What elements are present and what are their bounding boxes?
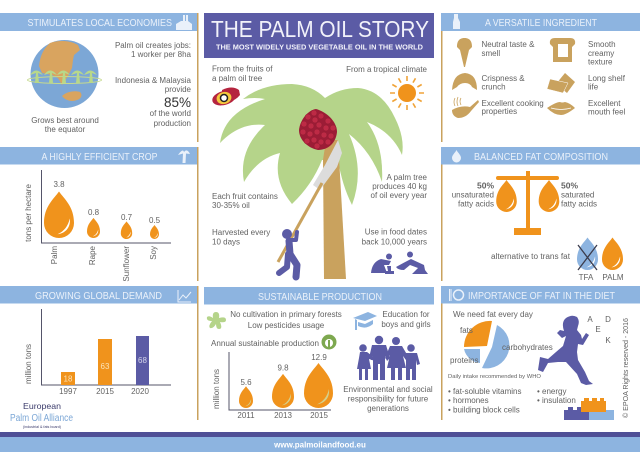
text: creamy texture: texture	[588, 58, 613, 66]
vitamins: E	[595, 325, 601, 334]
text: environmental and social responsibility: generations	[367, 404, 409, 413]
icon: RSPO logo	[322, 334, 336, 350]
list: fat functions left: • fat-soluble vitamins	[448, 387, 522, 396]
chart: tons per hectare: 0.5	[149, 216, 161, 225]
subtitle: THE MOST WIDELY USED VEGETABLE OIL IN THE WORLD	[216, 42, 423, 52]
chart: tons per hectare	[24, 170, 171, 282]
right drop	[539, 180, 559, 212]
chart: tons per hectare: Sunflower	[122, 246, 131, 282]
chart: demand bars: 2015	[96, 387, 114, 396]
text: creamy texture: Smooth	[588, 40, 616, 49]
list: fat functions left: • building block cells	[448, 406, 520, 414]
chart: sustainable production drops: million tons	[212, 369, 221, 409]
rape drop	[87, 218, 100, 238]
heading: stimulates local economies	[0, 13, 197, 31]
text: forests and pesticides: No cultivation in primary forests	[230, 310, 342, 319]
text: from the fruits: a palm oil tree	[212, 74, 263, 83]
icon: frying pan	[452, 97, 479, 118]
chart: demand bars: 18	[64, 374, 73, 384]
heading: growing global demand: GROWING GLOBAL DEMAND	[35, 291, 162, 302]
text: neutral taste: Neutral taste &	[482, 40, 534, 49]
footer url: www.palmoilandfood.eu	[273, 440, 366, 450]
icon: runner	[538, 316, 593, 385]
heading: versatile ingredient: A VERSATILE INGREDIENT	[485, 18, 597, 29]
chart: demand bars: 1997	[59, 387, 77, 396]
text: jobs: Palm oil creates jobs:	[115, 41, 191, 50]
text: harvested: 10 days	[212, 238, 240, 246]
note: who recommendation: Daily intake recommended by WHO	[448, 374, 541, 380]
chart: tons per hectare: 3.8	[53, 180, 65, 189]
chart: sustainable production drops: 2015	[310, 411, 328, 420]
text: indonesia and malaysia 85 percent: of the world	[150, 109, 191, 118]
panel: stimulates local economies	[0, 13, 198, 142]
text: food dates: Use in food dates	[365, 228, 427, 236]
text: unsaturated: 50%	[477, 180, 494, 190]
text: cooking properties: properties	[482, 107, 517, 116]
text: jobs: 1 worker per 8ha	[131, 50, 192, 59]
icon: bread slice	[550, 38, 575, 62]
text: annual sustainable production: Annual sustainable production	[211, 339, 319, 348]
soy drop	[150, 225, 159, 239]
chart: tons per hectare: Rape	[88, 245, 97, 265]
icon: plate	[450, 289, 464, 301]
logo: european palm oil alliance: Palm Oil Alliance	[10, 413, 73, 424]
illustration: palm tree	[220, 84, 403, 279]
palm drop	[44, 192, 74, 238]
icon: family	[357, 336, 420, 380]
text: produces oil: of oil every year	[371, 191, 427, 200]
text: indonesia and malaysia 85 percent: 85%	[164, 95, 191, 110]
chart: sustainable production drops: 2013	[274, 411, 292, 420]
chart: diet pie: fats	[460, 326, 473, 335]
chart: demand bars	[24, 309, 171, 396]
text: indonesia and malaysia 85 percent: Indonesia & Malaysia	[115, 76, 191, 85]
text: we need fat every day: We need fat every day	[453, 310, 533, 319]
vitamins: D	[605, 315, 611, 324]
title: THE PALM OIL STORY	[211, 16, 429, 42]
panel: highly efficient crop	[0, 147, 198, 282]
text: tropical climate: From a tropical climate	[346, 65, 428, 74]
chart: sustainable production drops	[212, 352, 333, 420]
icon: palm drop	[602, 237, 623, 270]
chart: tons per hectare: Soy	[149, 246, 158, 260]
icon: white drop	[452, 150, 461, 162]
heading: balanced fat composition	[441, 147, 640, 164]
list: fat functions left: • hormones	[448, 396, 489, 405]
caption: grows best around the equator: Grows best around	[31, 116, 99, 125]
heading: sustainable production	[204, 287, 434, 304]
list: fat functions right: • insulation	[537, 396, 576, 405]
text: unsaturated: unsaturated	[452, 190, 494, 200]
text: education: boys and girls	[381, 320, 431, 329]
text: indonesia and malaysia 85 percent: provide	[165, 85, 192, 94]
chart: tons per hectare: 0.7	[121, 213, 133, 222]
panel: balanced fat composition	[441, 147, 640, 282]
panel: growing global demand	[0, 286, 198, 429]
text: environmental and social responsibility: Environmental and social	[343, 385, 433, 394]
logo: european palm oil alliance	[10, 401, 73, 429]
harvesting blade	[313, 140, 342, 190]
icon: palm tree	[178, 150, 190, 163]
chart: demand bars: million tons	[24, 344, 33, 384]
text: alternative to trans fat: alternative to trans fat	[491, 252, 571, 261]
chart: demand bars: 63	[101, 362, 110, 371]
list: fat functions right: • energy	[537, 387, 566, 396]
text: environmental and social responsibility: responsibility for future	[348, 394, 429, 404]
text: mouth feel: Excellent	[588, 99, 620, 108]
icon: stacked squares	[547, 73, 575, 93]
icon: sun	[390, 76, 424, 110]
label: PALM: PALM	[602, 273, 624, 282]
text: saturated: fatty acids	[561, 200, 597, 208]
text: saturated: saturated	[561, 190, 594, 200]
heading: sustainable production: SUSTAINABLE PRODUCTION	[258, 292, 382, 303]
icon: factory	[176, 15, 192, 30]
icon: balance scale	[496, 171, 559, 235]
chart: tons per hectare: Palm	[50, 246, 59, 264]
icon: ice cream cone	[457, 38, 472, 67]
panel: importance of fat in the diet	[441, 286, 640, 420]
icon: palm fruit	[211, 88, 240, 108]
heading: versatile ingredient	[441, 13, 640, 31]
icon: crossed TFA drop	[577, 237, 598, 270]
caption: grows best around the equator: the equator	[45, 125, 86, 134]
icon: green flower	[207, 312, 226, 329]
chart: tons per hectare: 0.8	[88, 208, 100, 217]
heading: importance of fat in the diet	[441, 286, 640, 304]
icon: bottle	[453, 14, 460, 29]
text: unsaturated: fatty acids	[458, 200, 494, 208]
icon: line chart	[178, 290, 191, 302]
vitamins	[587, 315, 611, 345]
text: crispness: Crispness &	[482, 74, 525, 83]
logo: european palm oil alliance: European	[23, 401, 61, 411]
heading: balanced fat composition: BALANCED FAT COMPOSITION	[474, 152, 608, 163]
left drop	[496, 180, 517, 212]
heading: stimulates local economies: STIMULATES LOCAL ECONOMIES	[28, 18, 172, 29]
text: each fruit: 30-35% oil	[212, 201, 250, 210]
text: from the fruits: From the fruits of	[212, 64, 272, 74]
icon: building blocks	[564, 398, 614, 420]
chart: tons per hectare: tons per hectare	[24, 184, 33, 242]
chart: sustainable production drops: 9.8	[277, 364, 289, 372]
heading: highly efficient crop	[0, 147, 197, 164]
text: neutral taste: smell	[482, 49, 500, 58]
harvesting pole	[278, 183, 322, 262]
icon: croissant	[452, 73, 477, 90]
text: saturated: 50%	[561, 180, 578, 190]
icon: ancient people	[371, 252, 428, 274]
text: harvested: Harvested every	[212, 228, 270, 237]
icon: lips	[547, 102, 575, 115]
2013 drop	[272, 374, 294, 408]
footer	[0, 432, 640, 452]
heading: growing global demand	[0, 286, 197, 304]
2011 drop	[239, 386, 253, 408]
sunflower drop	[121, 221, 132, 239]
vitamins: K	[605, 336, 611, 345]
chart: demand bars: 68	[138, 356, 147, 365]
2015 drop	[304, 363, 333, 408]
text: food dates: back 10,000 years	[362, 238, 427, 246]
copyright: © EPOA Rights reserved - 2016	[622, 318, 630, 418]
panel: versatile ingredient	[441, 13, 640, 142]
palm fruit bunch	[299, 109, 337, 150]
text: crispness: crunch	[482, 82, 506, 92]
heading: highly efficient crop: A HIGHLY EFFICIENT CROP	[42, 152, 158, 163]
chart: diet pie: carbohydrates	[502, 343, 553, 352]
text: each fruit: Each fruit contains	[212, 192, 278, 201]
icon: graduation cap	[353, 312, 377, 330]
title banner	[204, 13, 434, 58]
text: long shelf life: life	[588, 82, 599, 92]
icon: globe with palm trees	[28, 40, 102, 108]
text: forests and pesticides: Low pesticides usage	[248, 321, 325, 330]
icon: harvester	[279, 229, 297, 277]
text: produces oil: A palm tree	[387, 173, 427, 182]
text: mouth feel: mouth feel	[588, 108, 626, 116]
chart: sustainable production drops: 2011	[237, 411, 255, 420]
panel: sustainable production	[204, 287, 434, 420]
vitamins: A	[587, 315, 593, 324]
text: creamy texture: creamy	[588, 49, 614, 58]
chart: diet pie: proteins	[450, 356, 478, 365]
text: indonesia and malaysia 85 percent: production	[154, 119, 191, 128]
label: TFA: TFA	[579, 273, 594, 282]
chart: sustainable production drops: 5.6	[240, 378, 252, 387]
text: cooking properties: Excellent cooking	[482, 99, 544, 108]
text: produces oil: produces 40 kg	[372, 182, 427, 191]
heading: importance of fat in the diet: IMPORTANCE OF FAT IN THE DIET	[468, 291, 615, 302]
text: long shelf life: Long shelf	[588, 74, 625, 83]
chart: diet pie	[450, 321, 553, 368]
text: education: Education for	[382, 310, 430, 319]
chart: demand bars: 2020	[131, 387, 149, 396]
panel: the palm oil story	[204, 13, 434, 279]
logo: european palm oil alliance: (industrial & fats board)	[23, 425, 61, 429]
chart: sustainable production drops: 12.9	[311, 353, 327, 362]
